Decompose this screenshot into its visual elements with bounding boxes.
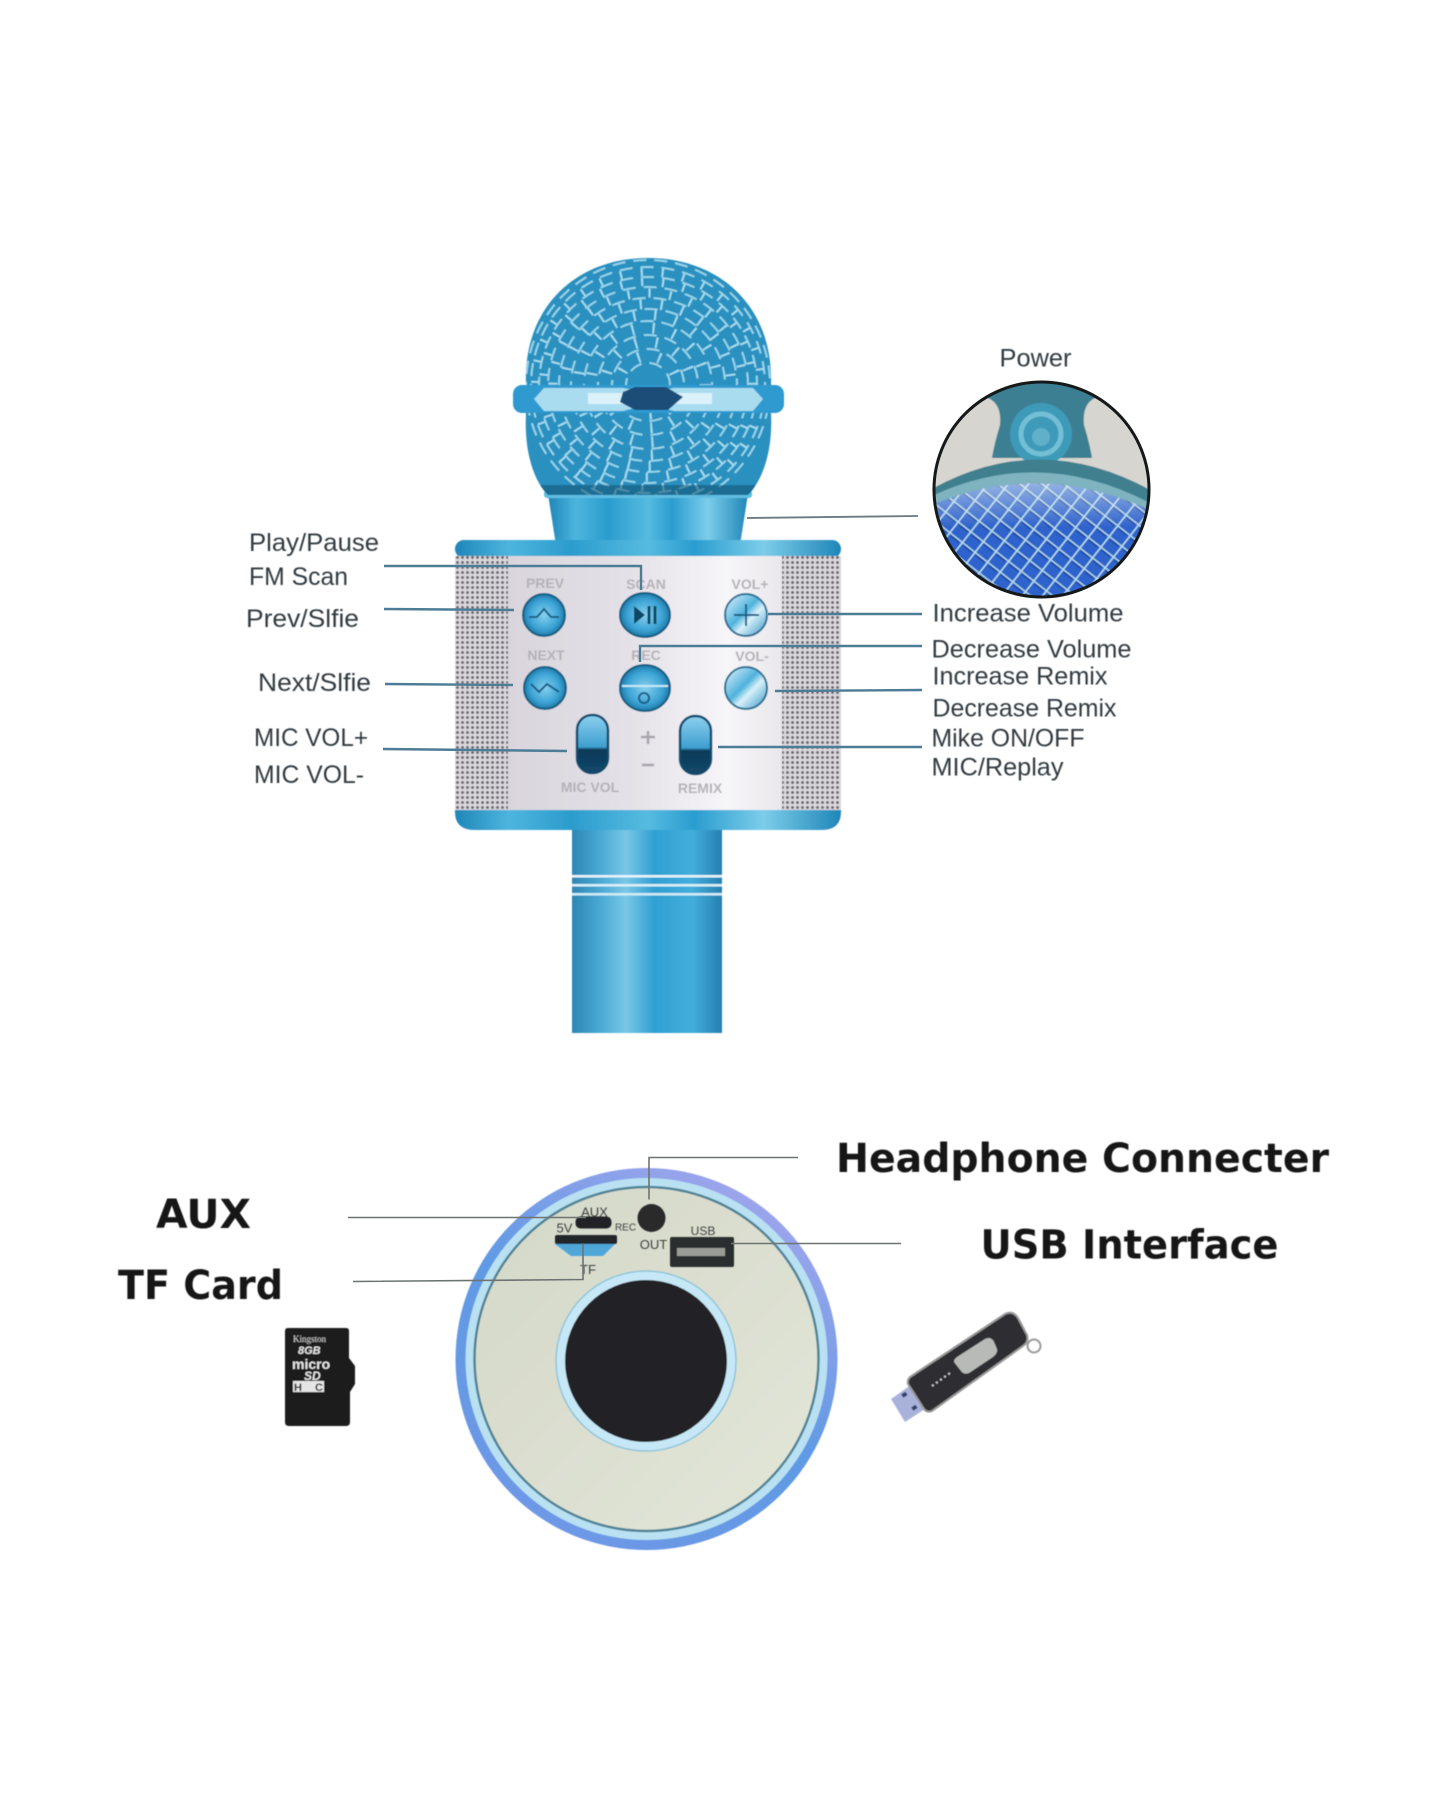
port: usb (670, 1224, 734, 1267)
switch: mic vol: MIC VOL (561, 779, 620, 795)
body top ring (455, 540, 841, 558)
button: rec (620, 647, 670, 711)
speaker grille left (455, 556, 508, 810)
port: headphone jack: OUT (640, 1237, 667, 1252)
labels: ports: AUX (156, 1192, 251, 1238)
labels: ports: Headphone Connecter (836, 1136, 1329, 1182)
port: aux (557, 1204, 636, 1236)
port: tf card slot: TF (580, 1262, 596, 1277)
button: next: NEXT (527, 647, 565, 663)
control panel (508, 556, 782, 810)
icon: micro SD card: micro (292, 1356, 330, 1372)
button: next (524, 647, 566, 709)
labels: ports: USB Interface (980, 1222, 1278, 1268)
labels: left controls (246, 529, 379, 789)
infographic canvas (117, 257, 1330, 1551)
switch: remix: REMIX (678, 780, 723, 796)
bottom view of microphone (456, 1168, 838, 1550)
labels: left controls: MIC VOL+ (254, 724, 368, 752)
labels: right controls: Decrease Remix (932, 694, 1117, 722)
button: prev: PREV (526, 575, 565, 591)
button: vol minus (725, 648, 769, 709)
labels: left controls: FM Scan (249, 563, 348, 591)
button: play pause (620, 576, 670, 637)
port: aux: 5V (557, 1220, 573, 1236)
neck (544, 490, 752, 545)
body bottom ring (455, 808, 841, 830)
labels: right controls: Mike ON/OFF (932, 724, 1084, 752)
labels: right controls: Increase Volume (932, 600, 1124, 628)
icon: USB flash drive (891, 1313, 1040, 1422)
port: tf card slot (555, 1235, 617, 1277)
speaker grille right (782, 556, 841, 810)
button: vol plus (725, 576, 768, 636)
labels: left controls: MIC VOL- (254, 761, 364, 789)
icon: micro SD card: 8GB (298, 1345, 321, 1357)
labels: right controls: MIC/Replay (932, 754, 1064, 782)
port: aux: REC (615, 1222, 636, 1234)
labels: left controls: Next/Slfie (258, 669, 371, 697)
button: rec: REC (631, 647, 661, 663)
button: vol minus: VOL- (735, 648, 769, 664)
labels: left controls: Prev/Slfie (246, 605, 359, 633)
icon: micro SD card (285, 1328, 355, 1426)
outer rim (456, 1168, 838, 1550)
plus minus marks (641, 731, 655, 765)
port: usb: USB (691, 1224, 715, 1238)
inner light ring (466, 1178, 828, 1540)
leader lines: bottom diagram (348, 1158, 901, 1282)
button: play pause: SCAN (626, 576, 666, 592)
labels: right controls: Increase Remix (932, 662, 1108, 690)
button: vol plus: VOL+ (732, 576, 768, 592)
labels: ports: TF Card (118, 1263, 283, 1309)
center hole ring (556, 1271, 736, 1451)
leader lines: top diagram (383, 516, 922, 751)
port: aux: AUX (581, 1204, 608, 1220)
microphone illustration (455, 250, 841, 1033)
labels: right controls: Decrease Volume (932, 636, 1132, 664)
labels: ports (118, 1136, 1329, 1309)
center hole (565, 1280, 727, 1442)
button: prev (523, 575, 565, 636)
power button magnifier (930, 378, 1154, 610)
metal band (513, 385, 784, 413)
labels: right controls (932, 600, 1132, 782)
switch: remix (678, 716, 723, 796)
icon: micro SD card: HC (294, 1382, 323, 1394)
label: power: Power (1000, 344, 1072, 372)
icon: micro SD card: Kingston (293, 1334, 327, 1344)
mesh head (524, 257, 772, 496)
handle (572, 828, 722, 1033)
port: headphone jack (638, 1204, 667, 1252)
switch: mic vol (561, 715, 620, 795)
icon: micro SD card: SD (304, 1369, 321, 1383)
base plate (474, 1187, 818, 1531)
labels: left controls: Play/Pause (249, 529, 379, 557)
